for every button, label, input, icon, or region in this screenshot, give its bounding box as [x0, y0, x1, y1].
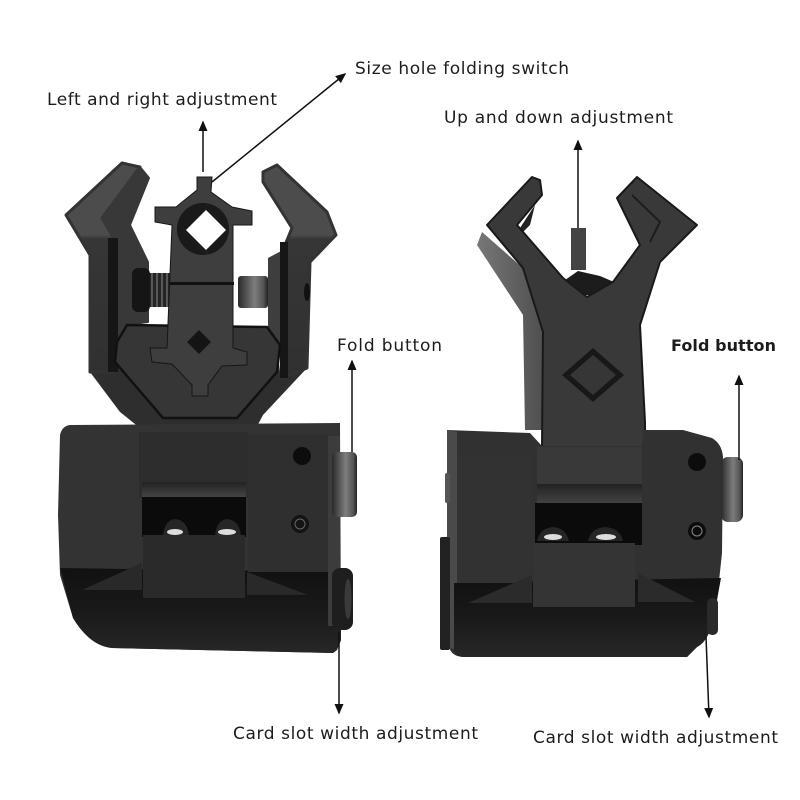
right sight: front blade: [487, 177, 697, 447]
arrow: fold button right: [738, 376, 740, 460]
left sight: base body: [58, 423, 341, 653]
left sight: steel balls: [163, 519, 241, 535]
label: Card slot width adjustment (left): Card slot width adjustment: [233, 724, 478, 744]
arrow: left and right adjustment: [202, 122, 204, 172]
left sight: shield plate: [115, 325, 280, 418]
right sight: base body: [447, 430, 723, 657]
label: Fold button (left): Fold button: [337, 336, 442, 356]
label: Card slot width adjustment (right): Card slot width adjustment: [533, 728, 778, 748]
right sight: fold button: [721, 457, 743, 522]
right sight: rear blade: [477, 177, 667, 430]
right sight: diamond recess: [562, 348, 624, 402]
right sight: holes: [688, 453, 706, 540]
right sight: [440, 177, 743, 657]
arrow: card slot left: [338, 632, 340, 713]
left sight: fold button: [332, 452, 357, 517]
left sight: screw and spring: [132, 268, 268, 312]
right sight: width adjustment knob: [707, 598, 718, 635]
arrow: card slot right: [706, 636, 709, 717]
right sight: centre post: [565, 228, 614, 295]
right sight: side clip: [440, 473, 450, 650]
left sight: width adjustment knob: [332, 568, 353, 630]
right sight: steel balls: [537, 527, 623, 541]
left sight: centre aperture: [150, 177, 252, 396]
arrow: size hole folding switch: [212, 74, 345, 182]
arrow: up and down adjustment: [577, 141, 579, 228]
left sight: holes: [291, 447, 311, 533]
label: Fold button (right): Fold button: [671, 336, 776, 355]
label: Left and right adjustment: Left and right adjustment: [47, 90, 277, 110]
label: Up and down adjustment: Up and down adjustment: [444, 108, 673, 128]
label: Size hole folding switch: Size hole folding switch: [355, 59, 569, 79]
left sight: upper frame and wings: [66, 163, 336, 445]
arrow: fold button left: [351, 361, 353, 452]
left sight: [58, 163, 357, 653]
